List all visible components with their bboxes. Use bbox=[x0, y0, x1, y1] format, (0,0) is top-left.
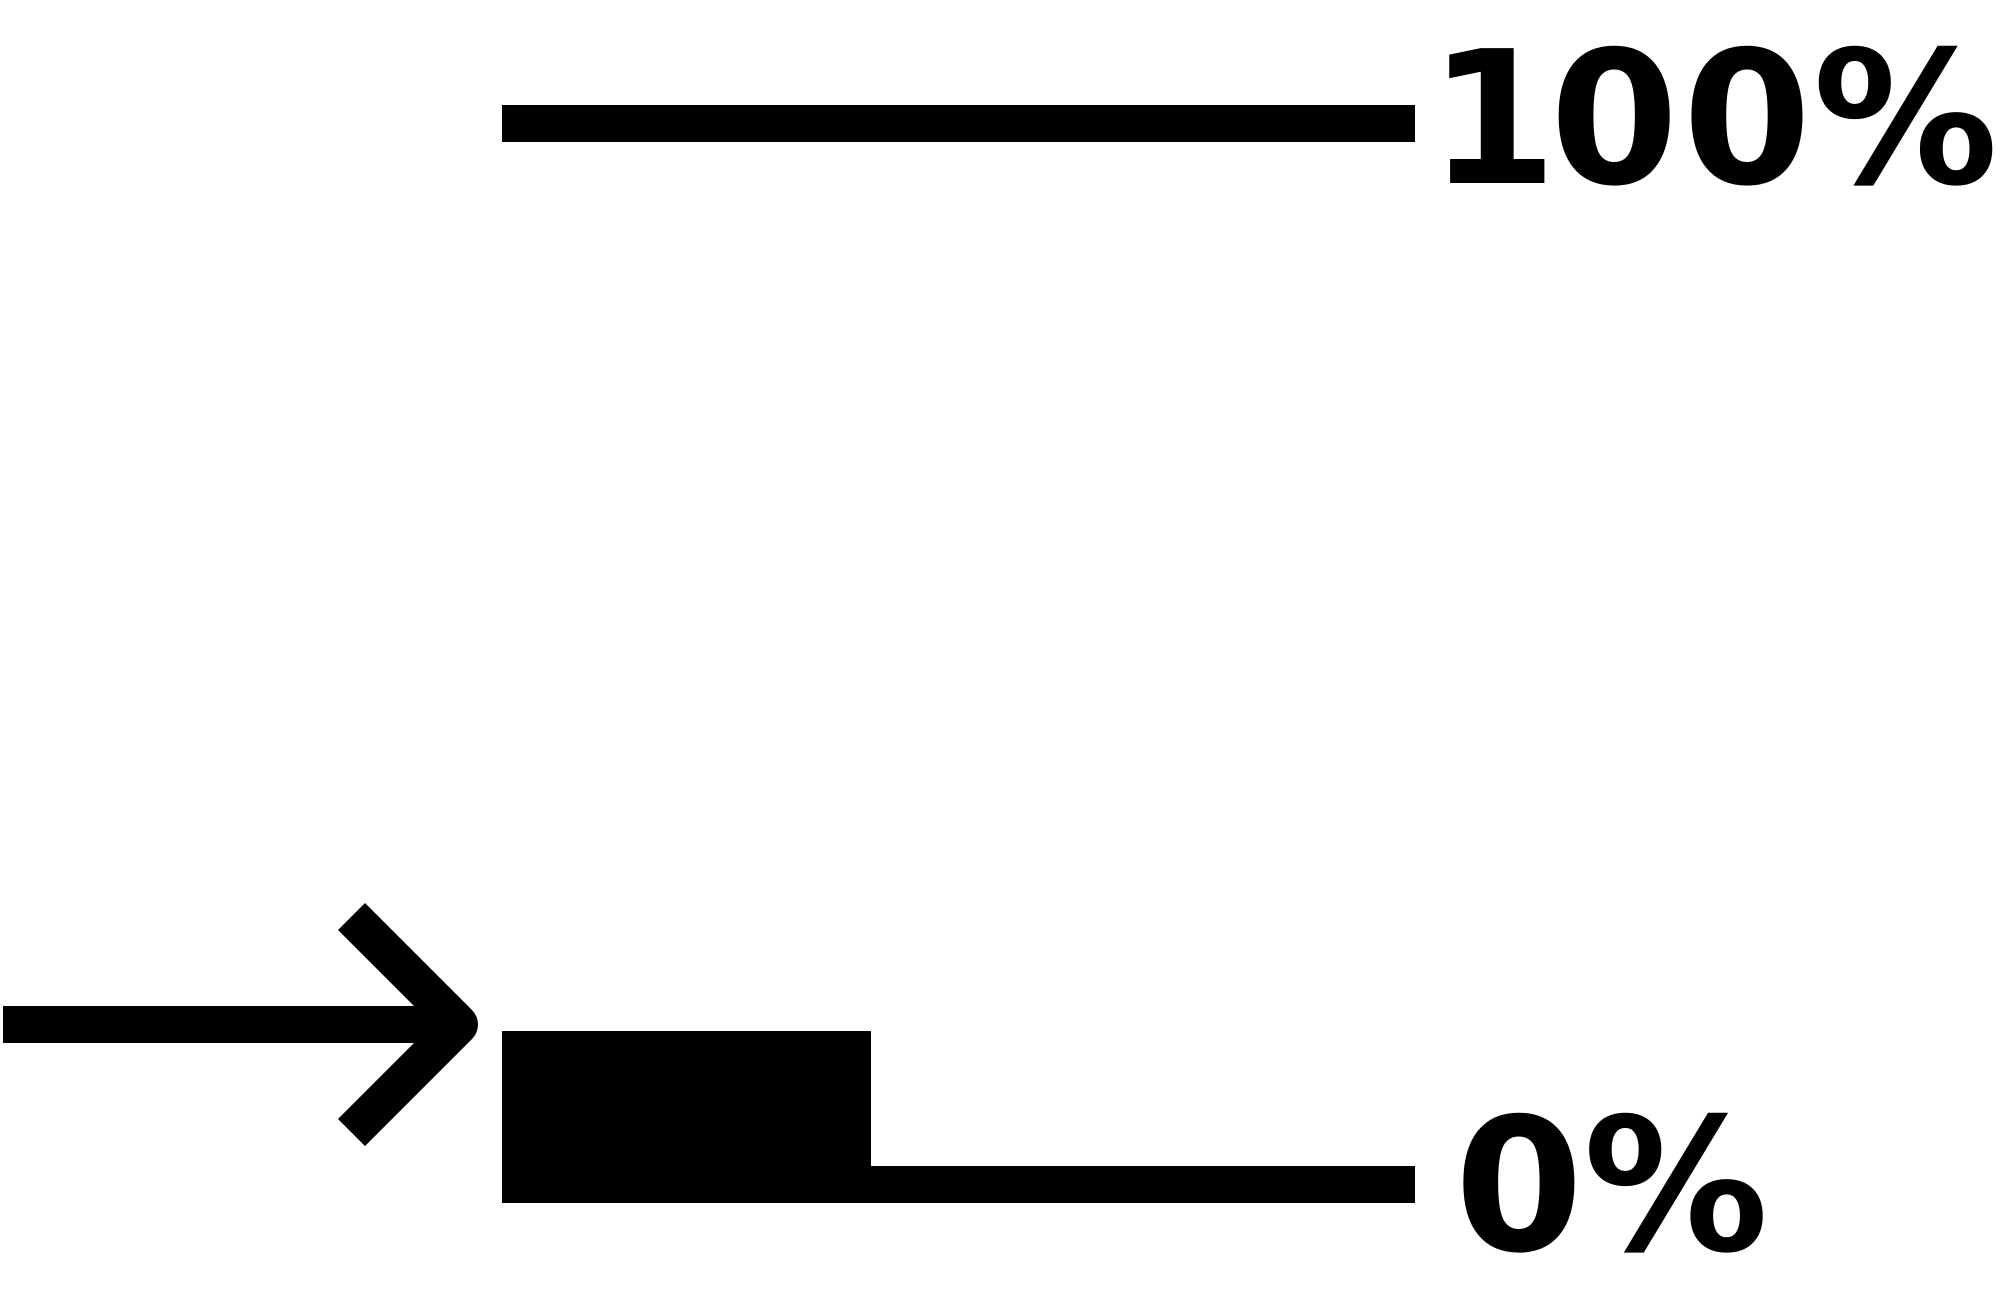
label: 100%: 100% bbox=[1428, 11, 1998, 227]
label: 0%: 0% bbox=[1454, 1078, 1769, 1294]
arrow pointing at current level bbox=[3, 903, 478, 1146]
top scale line bbox=[502, 105, 1415, 142]
filled level bar and baseline bbox=[502, 1031, 1415, 1203]
